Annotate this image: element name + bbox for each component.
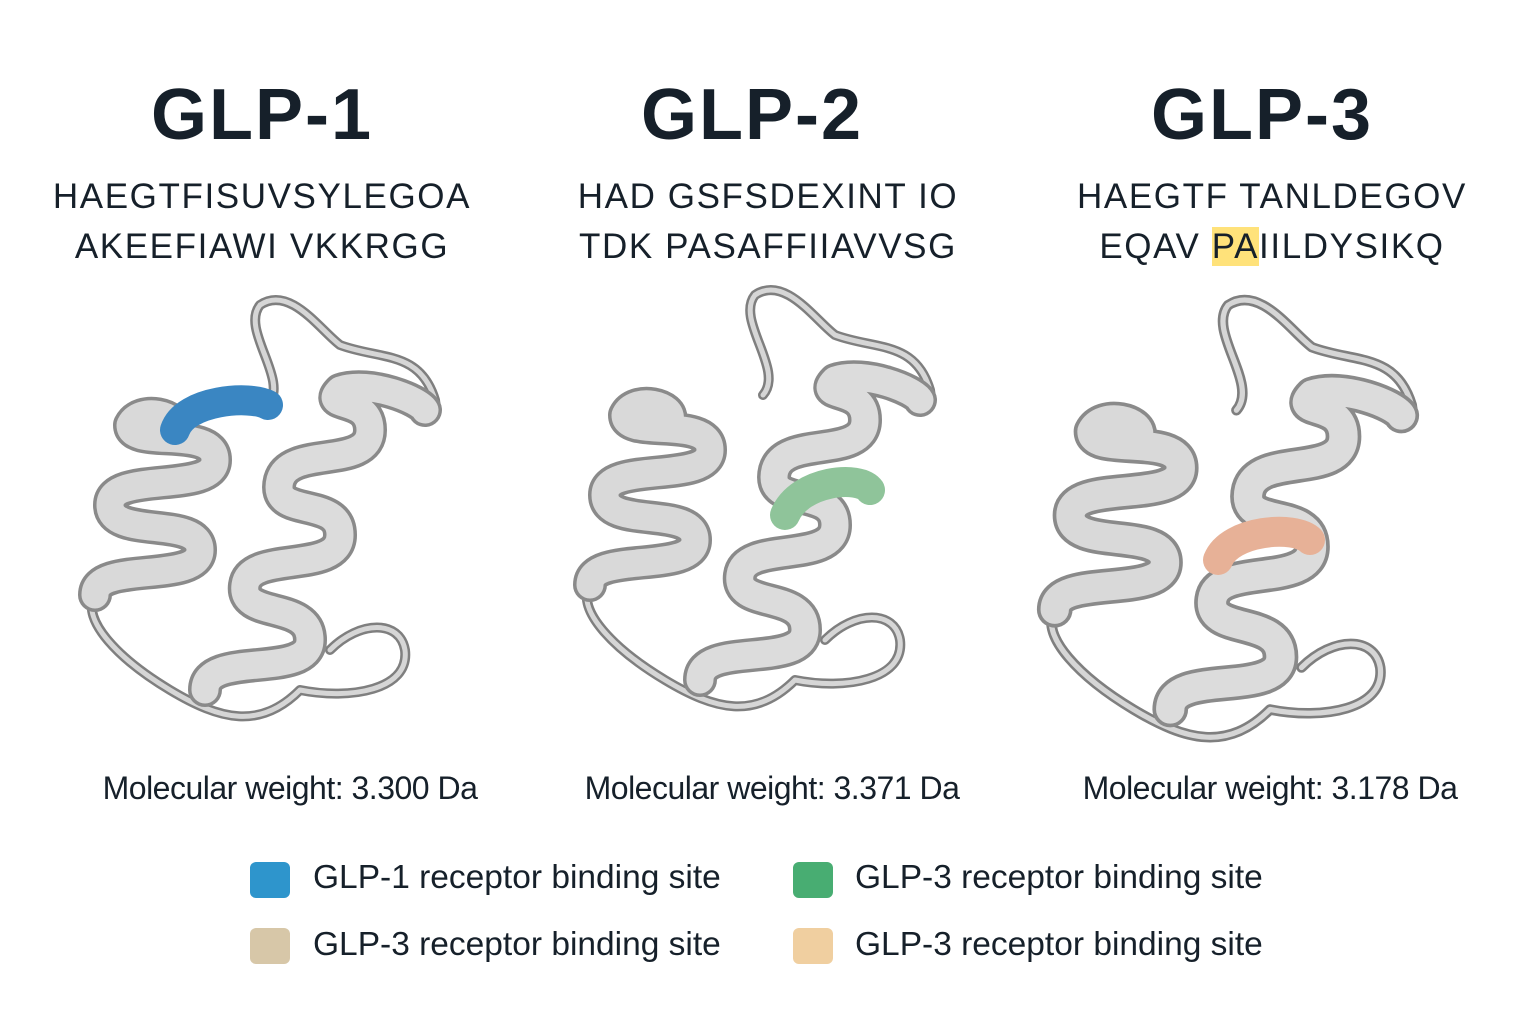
molecular weight GLP-3: Molecular weight: 3.178 Da bbox=[1083, 770, 1457, 806]
title: GLP-2: GLP-2 bbox=[641, 75, 863, 155]
legend: GLP-1 receptor binding site bbox=[313, 859, 721, 896]
sequence GLP-2: TDK PASAFFIIAVVSG bbox=[579, 227, 957, 266]
sequence GLP-3: HAEGTF TANLDEGOV bbox=[1077, 177, 1467, 216]
legend: GLP-3 receptor binding site bbox=[855, 926, 1263, 963]
legend: GLP-3 receptor binding site bbox=[313, 926, 721, 963]
sequence GLP-1: HAEGTFISUVSYLEGOA bbox=[53, 177, 471, 216]
legend item green bbox=[793, 859, 1263, 898]
protein GLP-3 bbox=[1051, 300, 1412, 737]
title: GLP-1: GLP-1 bbox=[151, 75, 373, 155]
sequence GLP-1 bbox=[53, 177, 471, 266]
protein GLP-2 bbox=[587, 290, 931, 706]
legend: GLP-3 receptor binding site bbox=[855, 859, 1263, 896]
sequence GLP-2: HAD GSFSDEXINT IO bbox=[578, 177, 958, 216]
title: GLP-3: GLP-3 bbox=[1151, 75, 1373, 155]
sequence GLP-3 bbox=[1077, 177, 1467, 266]
legend item blue bbox=[250, 859, 721, 898]
sequence GLP-3: EQAV PAIILDYSIKQ bbox=[1099, 227, 1445, 266]
legend bbox=[250, 859, 1263, 964]
molecular weight GLP-1: Molecular weight: 3.300 Da bbox=[103, 770, 477, 806]
legend item beige bbox=[250, 926, 721, 964]
legend item peach bbox=[793, 926, 1263, 964]
sequence GLP-1: AKEEFIAWI VKKRGG bbox=[75, 227, 449, 266]
protein GLP-1 bbox=[92, 300, 436, 716]
sequence GLP-2 bbox=[578, 177, 958, 266]
molecular weight GLP-2: Molecular weight: 3.371 Da bbox=[585, 770, 959, 806]
